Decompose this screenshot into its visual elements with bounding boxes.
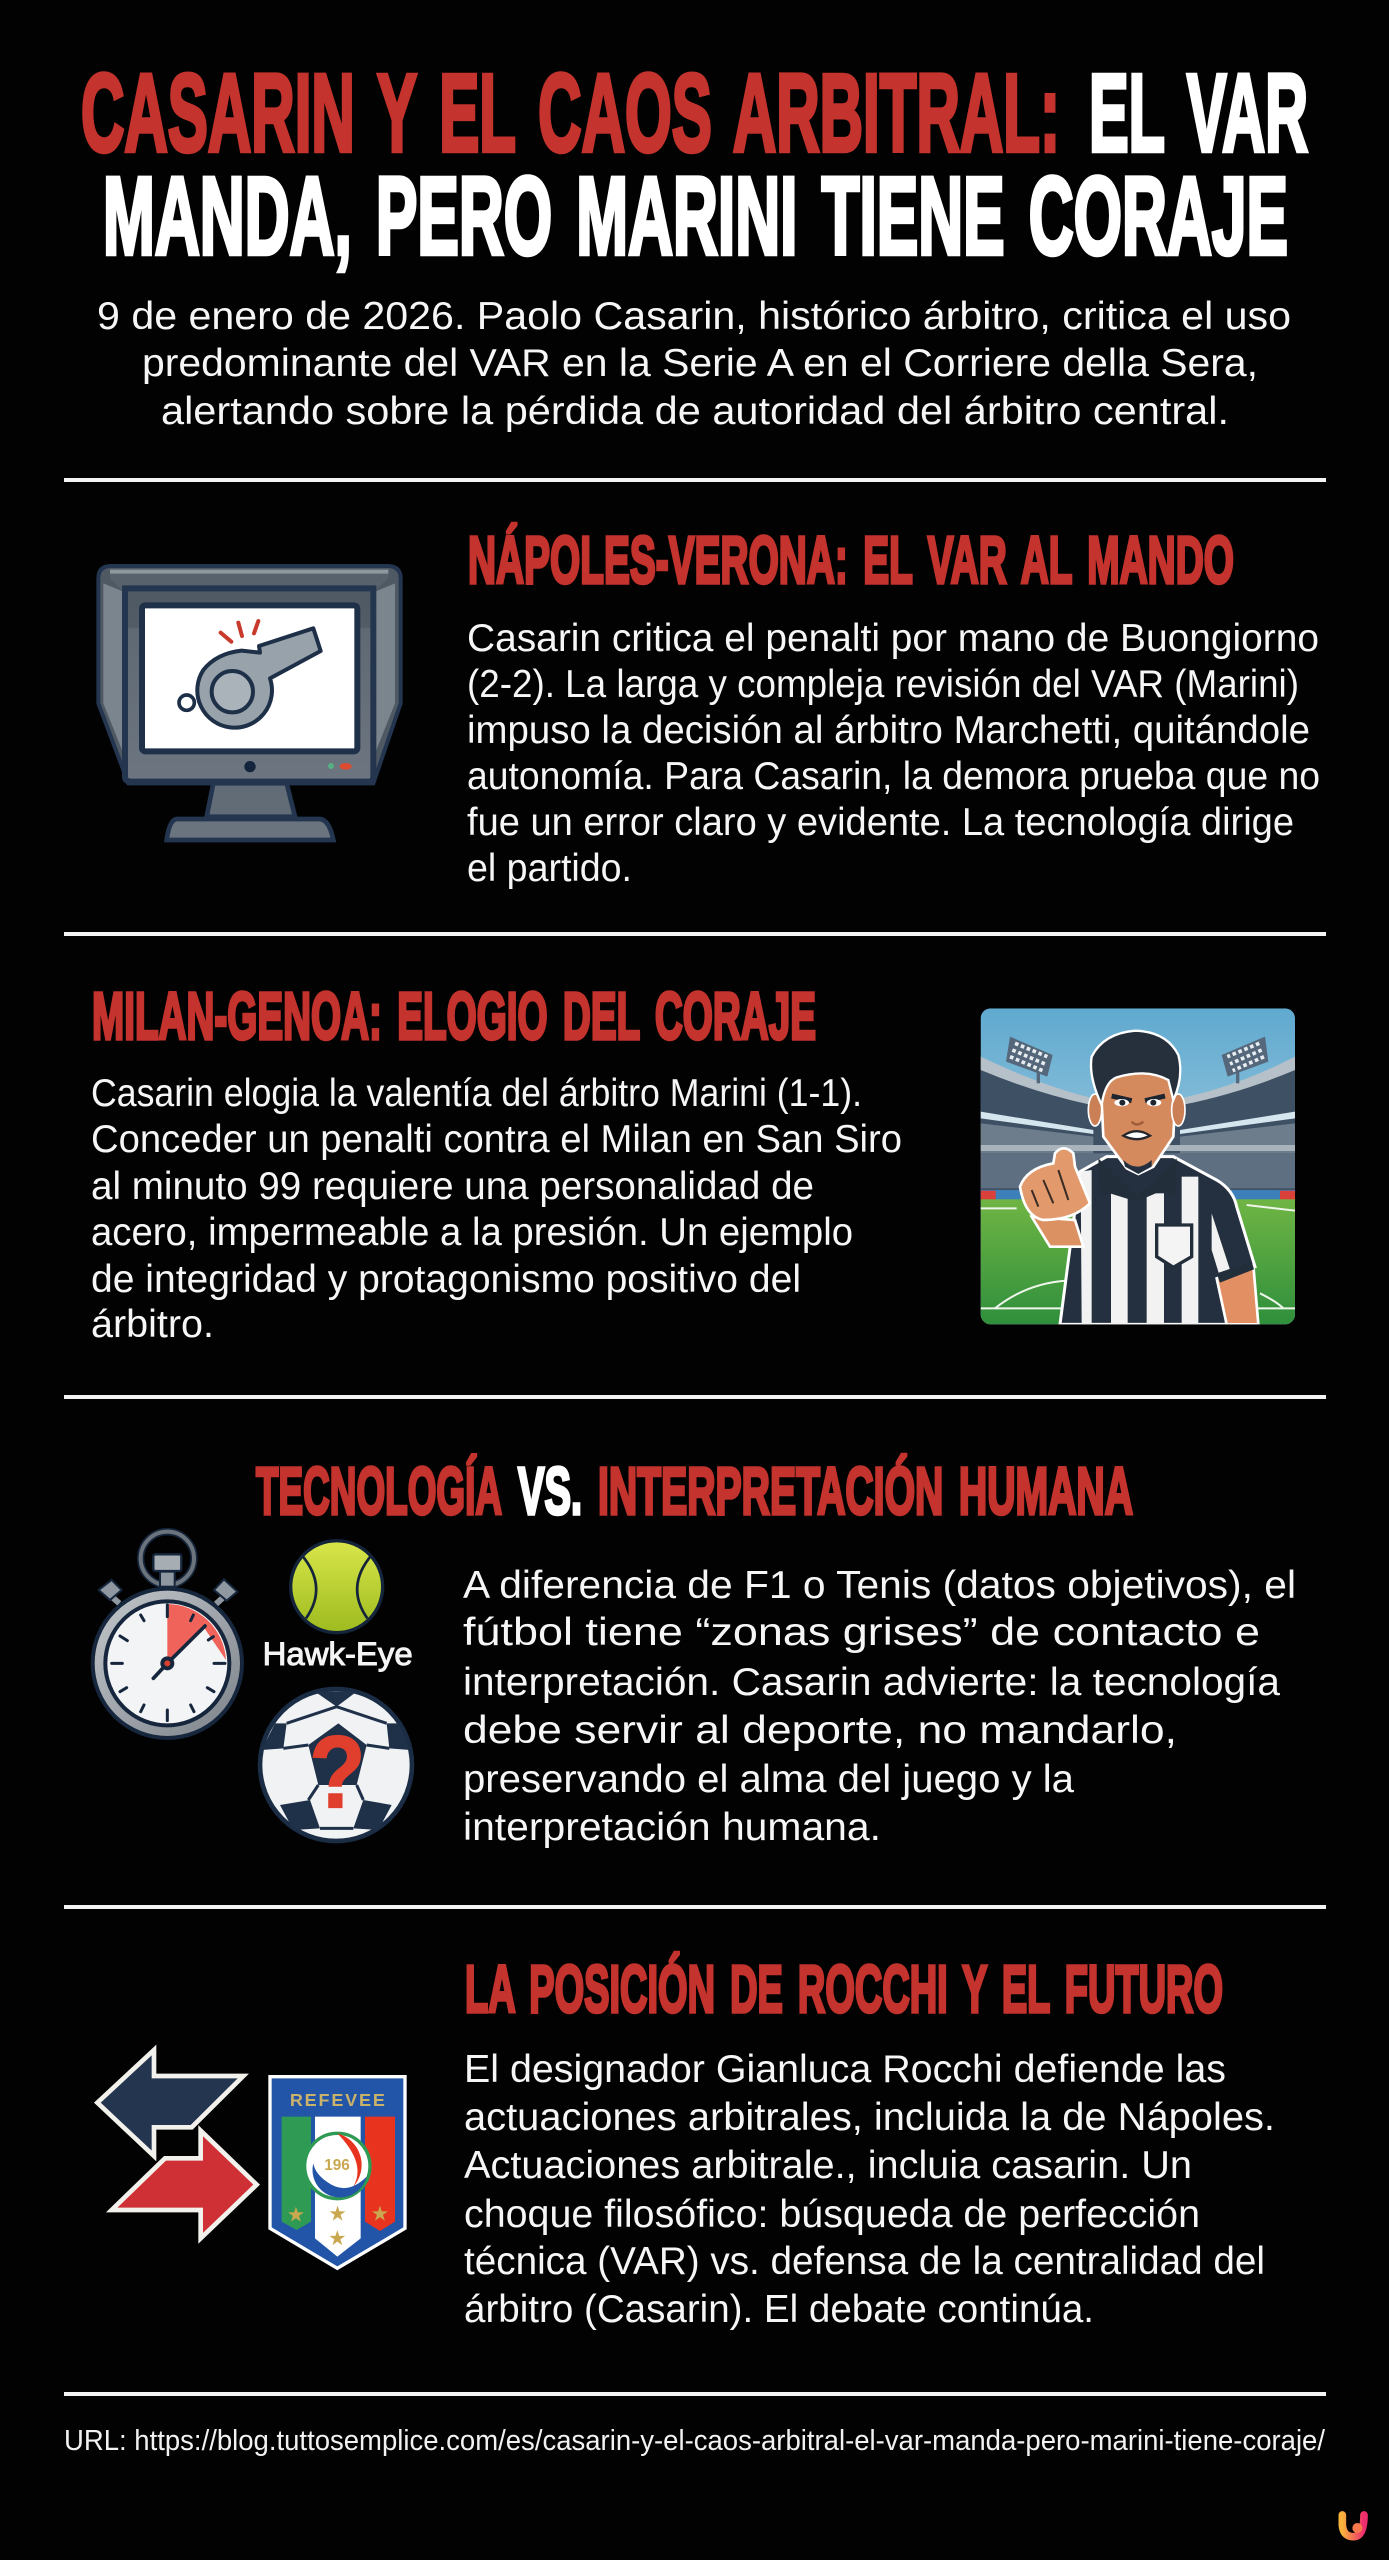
- source URL: URL: https://blog.tuttosemplice.com/es/casarin-y-el-caos-arbitral-el-var-manda-pero-marini-tiene-coraje/: [64, 2425, 1326, 2457]
- icon: VAR monitor with whistle: [98, 566, 401, 840]
- logo: [1342, 2515, 1364, 2537]
- text: technology: interpretación humana.: [463, 1806, 881, 1849]
- text: Rocchi: choque filosófico: búsqueda de perfección: [464, 2193, 1200, 2236]
- text: Milan-Genoa: Casarin elogia la valentía del árbitro Marini (1-1).: [91, 1072, 862, 1115]
- text: technology: A diferencia de F1 o Tenis (datos objetivos), el: [463, 1564, 1296, 1607]
- heading: Tecnología vs. interpretación humana: [256, 1454, 1133, 1529]
- referee head: [1088, 1031, 1185, 1174]
- text: Nápoles-Verona: [467, 617, 1320, 890]
- icon: referee shield: ★: [371, 2203, 389, 2226]
- heading: Milan-Genoa: MILAN-GENOA: ELOGIO DEL CORAJE: [92, 979, 816, 1054]
- stadium: [981, 1057, 1295, 1200]
- icon: referee shield: REFEVEE: [290, 2090, 385, 2110]
- text: Milan-Genoa: de integridad y protagonismo positivo del: [91, 1258, 801, 1301]
- text: technology: fútbol tiene “zonas grises” de contacto e: [463, 1611, 1260, 1654]
- intro text: 9 de enero de 2026. Paolo Casarin, histórico árbitro, critica el uso: [97, 295, 1291, 338]
- icon: stopwatch: [93, 1532, 242, 1738]
- icons: stopwatch, tennis ball, football: [93, 1532, 413, 1841]
- icon: dark left arrow: [97, 2050, 243, 2156]
- text: Rocchi: [464, 2048, 1275, 2331]
- text: Nápoles-Verona: (2-2). La larga y compleja revisión del VAR (Marini): [467, 663, 1299, 706]
- referee body: [1060, 1157, 1258, 1324]
- intro text: predominante del VAR en la Serie A en el Corriere della Sera,: [142, 342, 1258, 385]
- text: Rocchi: árbitro (Casarin). El debate continúa.: [464, 2288, 1094, 2331]
- icon: red right arrow: [112, 2131, 257, 2238]
- text: technology: debe servir al deporte, no mandarlo,: [463, 1709, 1177, 1752]
- text: Rocchi: técnica (VAR) vs. defensa de la centralidad del: [464, 2240, 1265, 2283]
- heading: Tecnología vs. interpretación humana: TECNOLOGÍA: [256, 1454, 502, 1529]
- icon: tennis ball: [291, 1541, 383, 1633]
- text: Milan-Genoa: Conceder un penalti contra el Milan en San Siro: [91, 1118, 902, 1161]
- text: technology: preservando el alma del juego y la: [463, 1758, 1074, 1801]
- text: Rocchi: Actuaciones arbitrale., incluia casarin. Un: [464, 2144, 1192, 2187]
- pointing hand: [1020, 1148, 1090, 1247]
- text: Nápoles-Verona: Casarin critica el penalti por mano de Buongiorno: [467, 617, 1319, 660]
- heading: Tecnología vs. interpretación humana: VS.: [518, 1454, 582, 1529]
- icon: referee shield: [270, 2077, 405, 2268]
- text: Nápoles-Verona: fue un error claro y evidente. La tecnología dirige: [467, 801, 1294, 844]
- text: Milan-Genoa: al minuto 99 requiere una personalidad de: [91, 1165, 814, 1208]
- text: Milan-Genoa: [91, 1072, 902, 1346]
- icon: referee shield: ★: [328, 2227, 347, 2250]
- text: technology: [463, 1564, 1296, 1849]
- text: Milan-Genoa: acero, impermeable a la presión. Un ejemplo: [91, 1211, 853, 1254]
- intro text: [97, 295, 1291, 433]
- text: Nápoles-Verona: el partido.: [467, 847, 632, 890]
- whistle: [179, 621, 321, 728]
- icon: referee shield: ★: [328, 2203, 347, 2226]
- floodlights: [1006, 1037, 1268, 1083]
- icons: arrows and referee shield: [97, 2050, 405, 2268]
- icon: football with question mark: ?: [309, 1714, 366, 1830]
- text: Rocchi: El designador Gianluca Rocchi defiende las: [464, 2048, 1226, 2091]
- text: technology: interpretación. Casarin advierte: la tecnología: [463, 1661, 1280, 1704]
- text: Milan-Genoa: árbitro.: [91, 1303, 214, 1346]
- icon: football with question mark: [260, 1689, 412, 1841]
- icon: referee shield: 196: [324, 2157, 350, 2174]
- text: Rocchi: actuaciones arbitrales, incluida la de Nápoles.: [464, 2096, 1275, 2139]
- icon: referee shield: ★: [287, 2204, 305, 2227]
- illustration: referee pointing in stadium: [981, 1008, 1295, 1324]
- intro text: alertando sobre la pérdida de autoridad del árbitro central.: [161, 390, 1229, 433]
- text: Nápoles-Verona: autonomía. Para Casarin, la demora prueba que no: [467, 755, 1320, 798]
- title: [81, 52, 1308, 278]
- text: Nápoles-Verona: impuso la decisión al árbitro Marchetti, quitándole: [467, 709, 1310, 752]
- label: Hawk-Eye: Hawk-Eye: [263, 1635, 413, 1672]
